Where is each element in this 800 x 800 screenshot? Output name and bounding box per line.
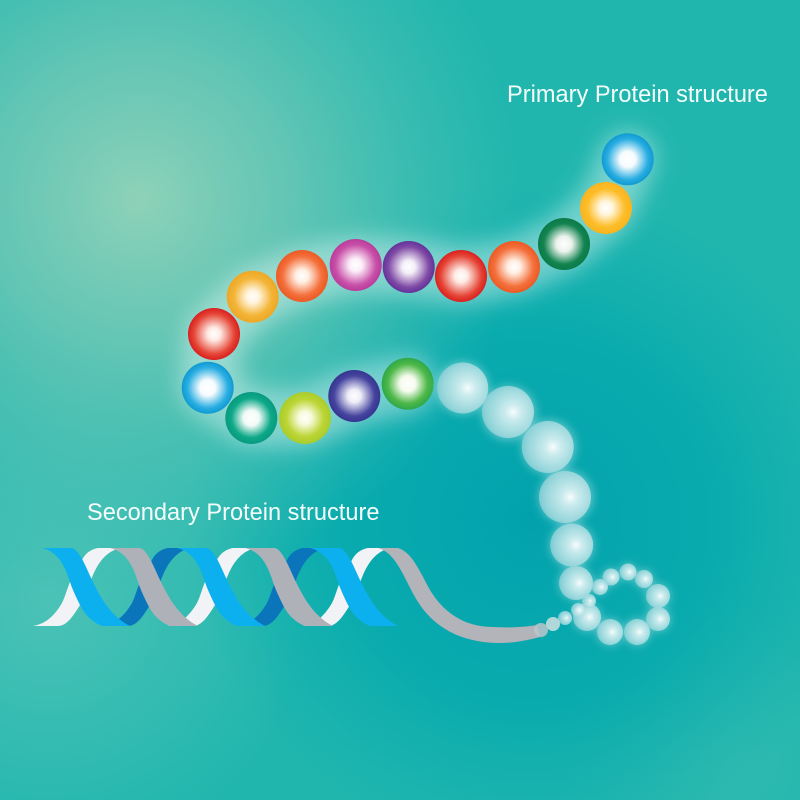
loop bead (646, 607, 670, 631)
loop bead (582, 594, 596, 608)
bead: lime (279, 392, 331, 444)
tail bead (546, 617, 560, 631)
bead: blue (182, 362, 234, 414)
loop bead (646, 584, 670, 608)
bead: orange (488, 241, 540, 293)
loop bead (573, 603, 601, 631)
loop bead (592, 579, 608, 595)
back strand: white and dark blue (33, 548, 390, 626)
bead: magenta (330, 239, 382, 291)
loop bead (597, 619, 623, 645)
title: secondary protein structure: Secondary Protein structure (87, 500, 379, 526)
pale bead (482, 386, 534, 438)
bead: red (188, 308, 240, 360)
transition: pale translucent bead chain and loop (437, 362, 670, 645)
bead: orange (276, 250, 328, 302)
loop bead (624, 619, 650, 645)
bead: navy (328, 370, 380, 422)
loop bead (620, 564, 636, 580)
bead: dark green (538, 218, 590, 270)
pale bead (522, 421, 574, 473)
bead: blue (602, 133, 654, 185)
bead: purple (383, 241, 435, 293)
pale bead (559, 566, 593, 600)
loop bead (635, 570, 653, 588)
bead: green (382, 358, 434, 410)
bead: red (435, 250, 487, 302)
pale bead (437, 362, 488, 414)
secondary structure: double helix ribbon (33, 548, 540, 643)
bead: teal (225, 392, 277, 444)
bead: yellow (580, 182, 632, 234)
pale bead (550, 524, 593, 566)
tail bead (534, 623, 548, 637)
soft glow behind bead chain (208, 159, 628, 418)
bead: amber (227, 271, 279, 323)
glow behind pale beads (436, 361, 671, 646)
primary structure: coloured bead chain (182, 133, 654, 444)
pale bead (539, 471, 591, 523)
loop bead (602, 568, 620, 586)
grey tail leading to beads (378, 548, 540, 643)
front strand: cyan and grey (42, 548, 540, 643)
loop bead (571, 603, 585, 617)
title: primary protein structure: Primary Protein structure (507, 82, 768, 108)
tail bead (558, 611, 572, 625)
